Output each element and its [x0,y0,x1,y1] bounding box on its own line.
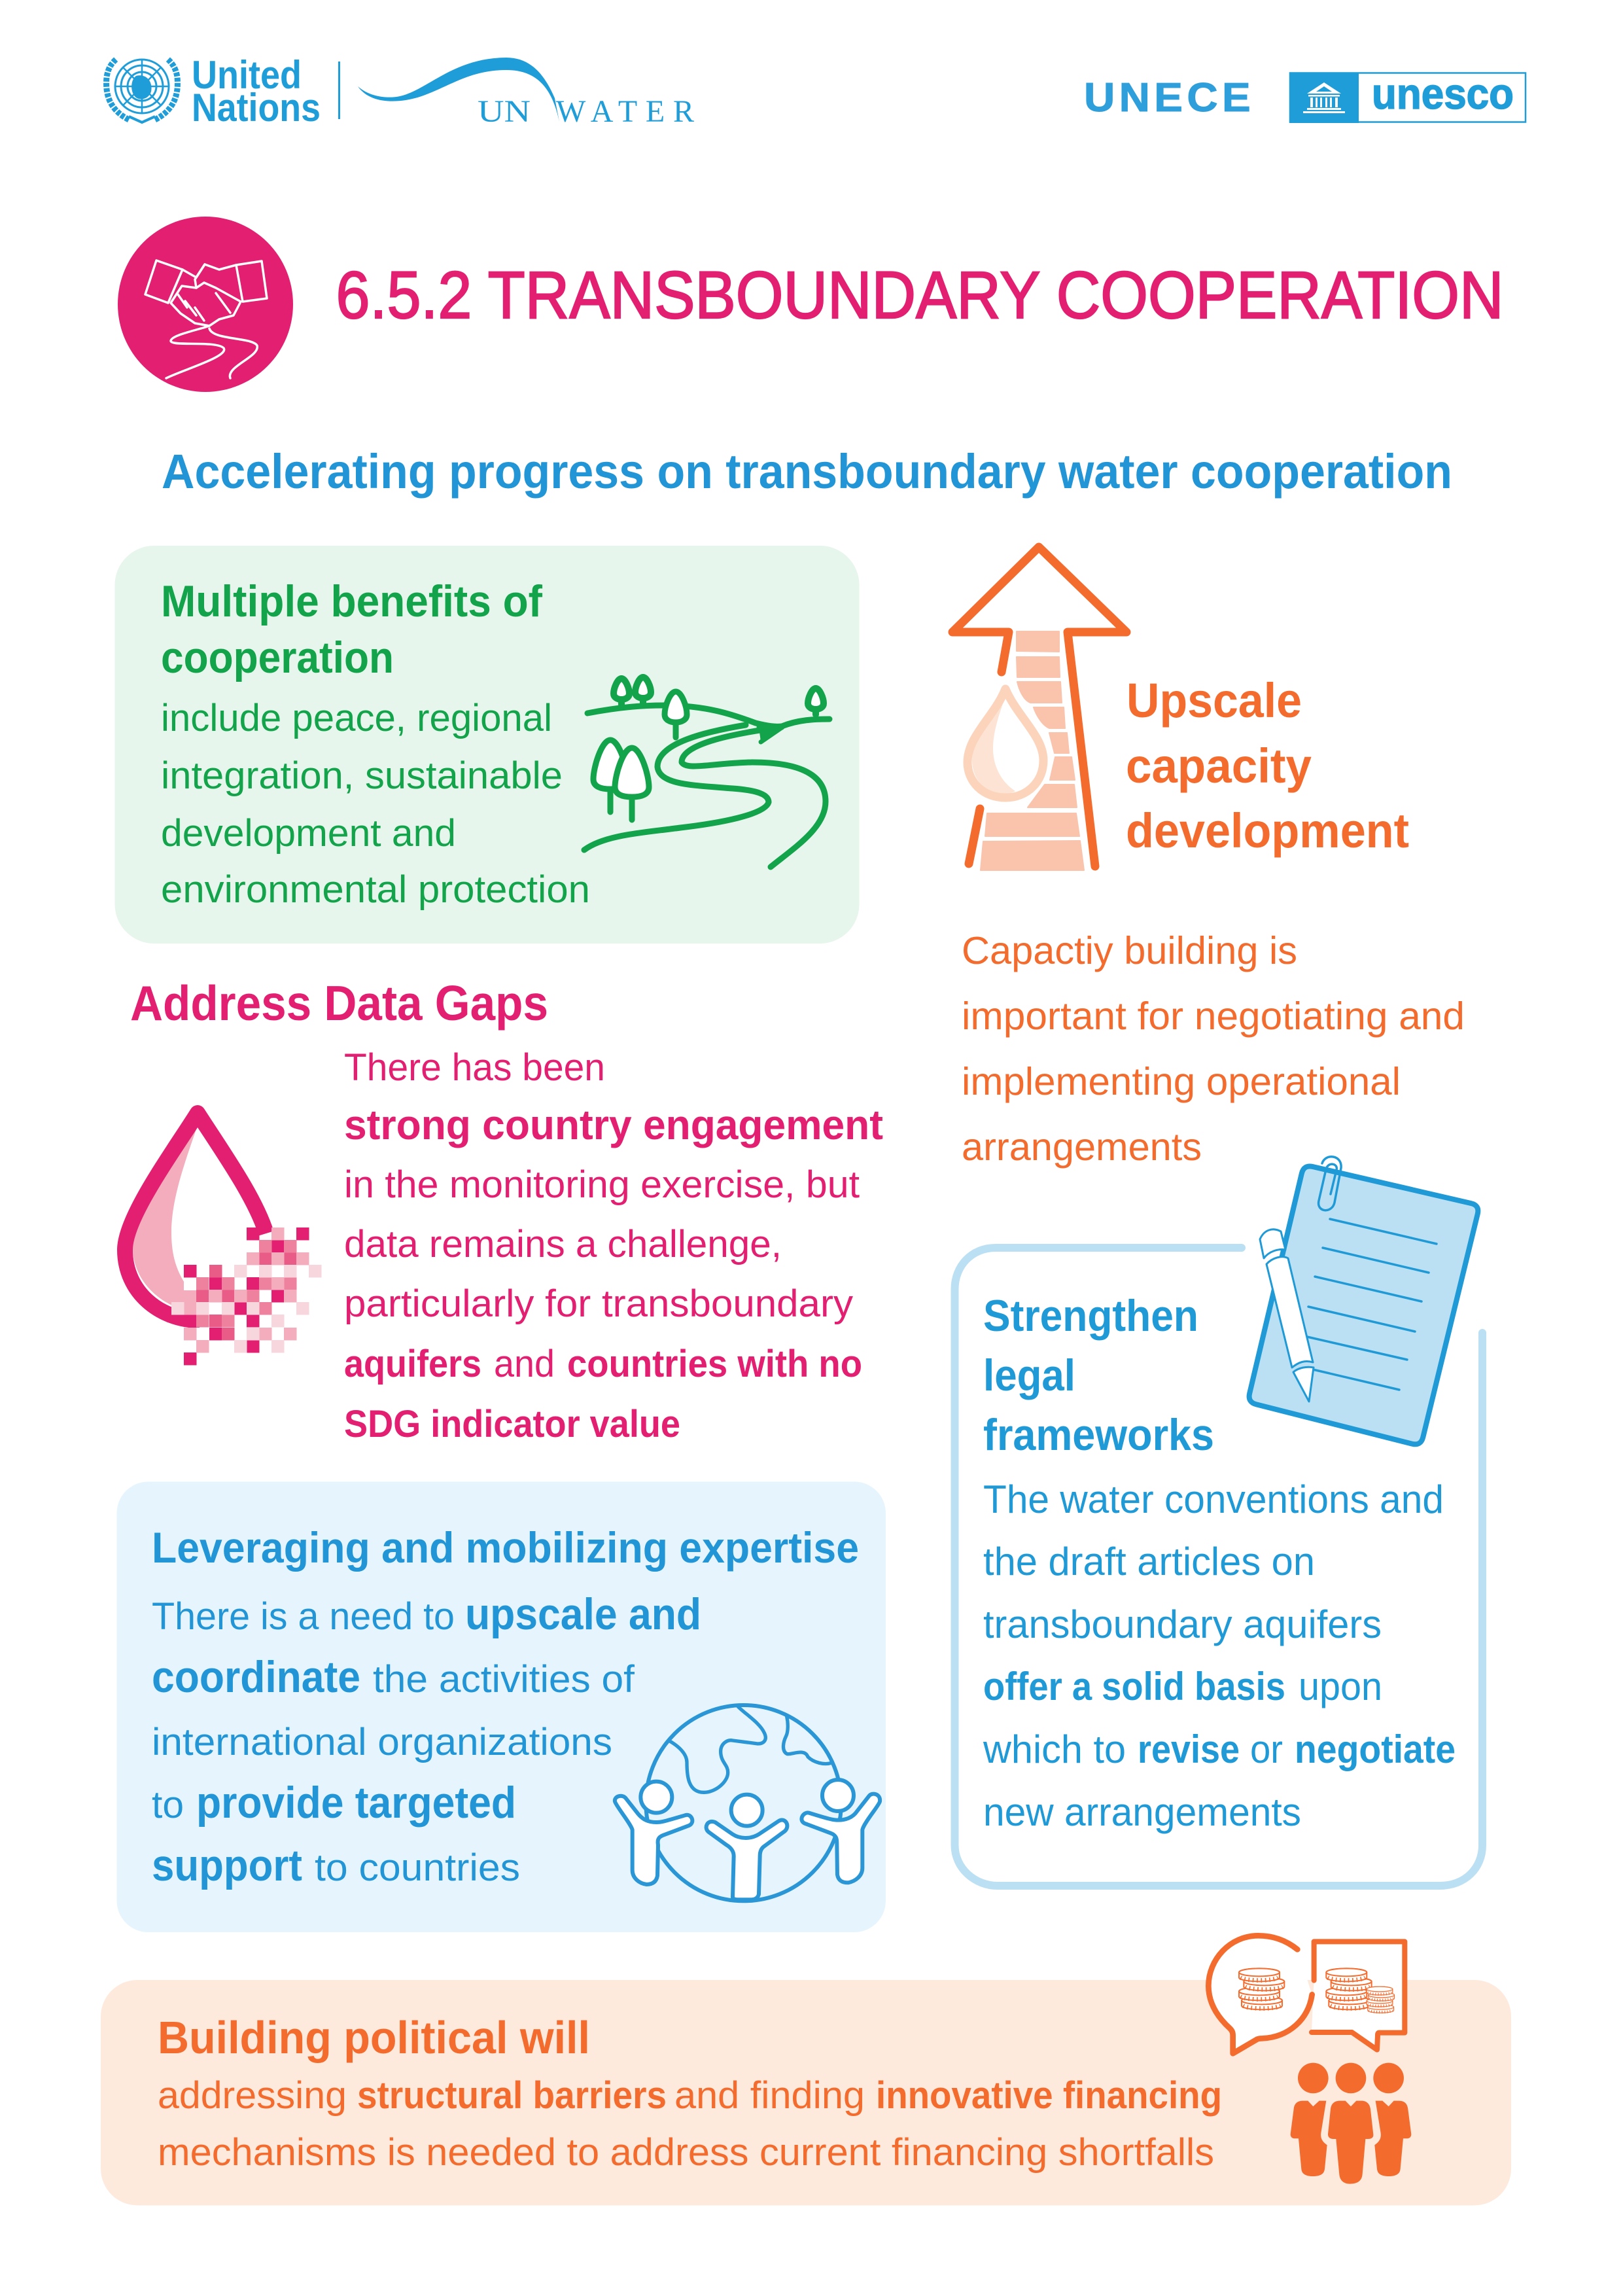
text: benefits body: include peace, regional [161,697,552,739]
text: expertise body: to countries [315,1846,520,1889]
heading: strengthen legal frameworks: Strengthen [983,1291,1198,1341]
heading: multiple benefits: Multiple benefits of [161,576,542,626]
text: political will body: structural barriers [357,2074,667,2117]
text: data gaps body: aquifers [344,1343,481,1385]
bricks [981,631,1084,870]
panel: leveraging expertise [116,1481,886,1932]
text: political will body: and finding [674,2074,865,2117]
panel: multiple benefits [115,546,860,944]
icon: river landscape [584,677,829,867]
logo: UNESCO: unesco [1372,69,1514,118]
icon: document with pencil and paperclip [1249,1157,1478,1444]
panel: building political will [101,1935,1511,2205]
text: legal frameworks body: upon [1299,1665,1382,1708]
heading: multiple benefits [161,576,542,682]
text: political will body: innovative financing [876,2074,1222,2117]
text: data gaps body: SDG indicator value [344,1403,680,1445]
text: legal frameworks body: or [1250,1727,1283,1771]
text: benefits body [161,697,590,911]
heading: upscale capacity development: Upscale [1126,673,1302,728]
icon: UN emblem [107,59,177,122]
heading: upscale capacity development: development [1126,804,1409,858]
text: benefits body: integration, sustainable [161,754,563,797]
text: data gaps body: strong country engagement [344,1101,883,1148]
icon: speech bubbles with coins and people [1208,1935,1411,2184]
text: expertise body: support [152,1841,302,1890]
logo: United Nations: United [192,53,302,97]
text: capacity building: Capactiy building is [962,929,1297,972]
text: capacity building: important for negotiating and [962,995,1465,1038]
heading: leveraging and mobilizing expertise: Leveraging and mobilizing expertise [152,1523,859,1572]
text: expertise body: upscale and [465,1589,701,1639]
icon: handshake and river badge [118,217,293,392]
text: data gaps body [344,1046,883,1445]
text: data gaps body: particularly for transboundary [344,1282,853,1325]
text: benefits body: development and [161,812,456,855]
text: legal frameworks body: negotiate [1295,1727,1456,1771]
text: legal frameworks body: revise [1138,1727,1240,1771]
text: expertise body: the activities of [373,1658,635,1701]
text: legal frameworks body: offer a solid basis [983,1665,1285,1708]
text: legal frameworks body: the draft articles on [983,1540,1315,1583]
text: data gaps body: data remains a challenge, [344,1223,782,1265]
text: data gaps body: There has been [344,1046,605,1089]
arrow outline [952,547,1126,866]
text: expertise body: There is a need to [152,1595,455,1638]
heading: address data gaps: Address Data Gaps [130,976,548,1031]
icon: pixelated drop [125,1113,322,1365]
heading: upscale capacity development: capacity [1126,739,1312,793]
logo: UN-Water: WATER [556,94,694,129]
heading: strengthen legal frameworks: legal [983,1351,1075,1400]
logo: United Nations [107,53,340,130]
text: data gaps body: countries with no [567,1343,862,1385]
text: political will body: addressing [158,2074,347,2117]
text: expertise body: to [152,1784,184,1826]
heading: strengthen legal frameworks [983,1291,1214,1460]
text: legal frameworks body: transboundary aquifers [983,1602,1382,1646]
logo: United Nations: Nations [192,86,321,130]
logo: UNECE: UNECE [1084,75,1255,120]
heading: building political will: Building political will [158,2012,590,2063]
text: capacity building: arrangements [962,1125,1202,1169]
text: political will body: mechanisms is needed to address current financing shortfalls [158,2131,1214,2174]
heading: strengthen legal frameworks: frameworks [983,1410,1214,1460]
text: capacity building: implementing operational [962,1060,1401,1103]
icon: arrow with bricks and drop [952,547,1126,870]
panel: strengthen legal frameworks [955,1157,1482,1886]
text: capacity building [962,929,1465,1169]
heading: multiple benefits: cooperation [161,633,394,682]
text: legal frameworks body: The water conventions and [983,1477,1444,1521]
text: legal frameworks body: new arrangements [983,1790,1301,1834]
logo: UNESCO [1289,69,1526,123]
drop [972,696,1015,794]
text: political will body [158,2074,1222,2174]
icon: globe with people [615,1705,880,1901]
text: expertise body [152,1589,701,1890]
text: legal frameworks body: which to [983,1727,1126,1771]
title: 6.5.2 TRANSBOUNDARY COOPERATION [336,258,1503,332]
text: expertise body: provide targeted [196,1778,516,1828]
logo: UN-Water: UN [478,94,531,129]
text: expertise body: international organizations [152,1721,612,1763]
logo: UN-Water [358,58,694,129]
heading: upscale capacity development [1126,673,1409,858]
text: legal frameworks body [983,1477,1456,1834]
text: data gaps body: in the monitoring exercise, but [344,1163,860,1206]
subtitle: Accelerating progress on transboundary water cooperation [162,444,1452,499]
text: data gaps body: and [494,1343,555,1385]
text: benefits body: environmental protection [161,868,590,911]
text: expertise body: coordinate [152,1652,360,1702]
